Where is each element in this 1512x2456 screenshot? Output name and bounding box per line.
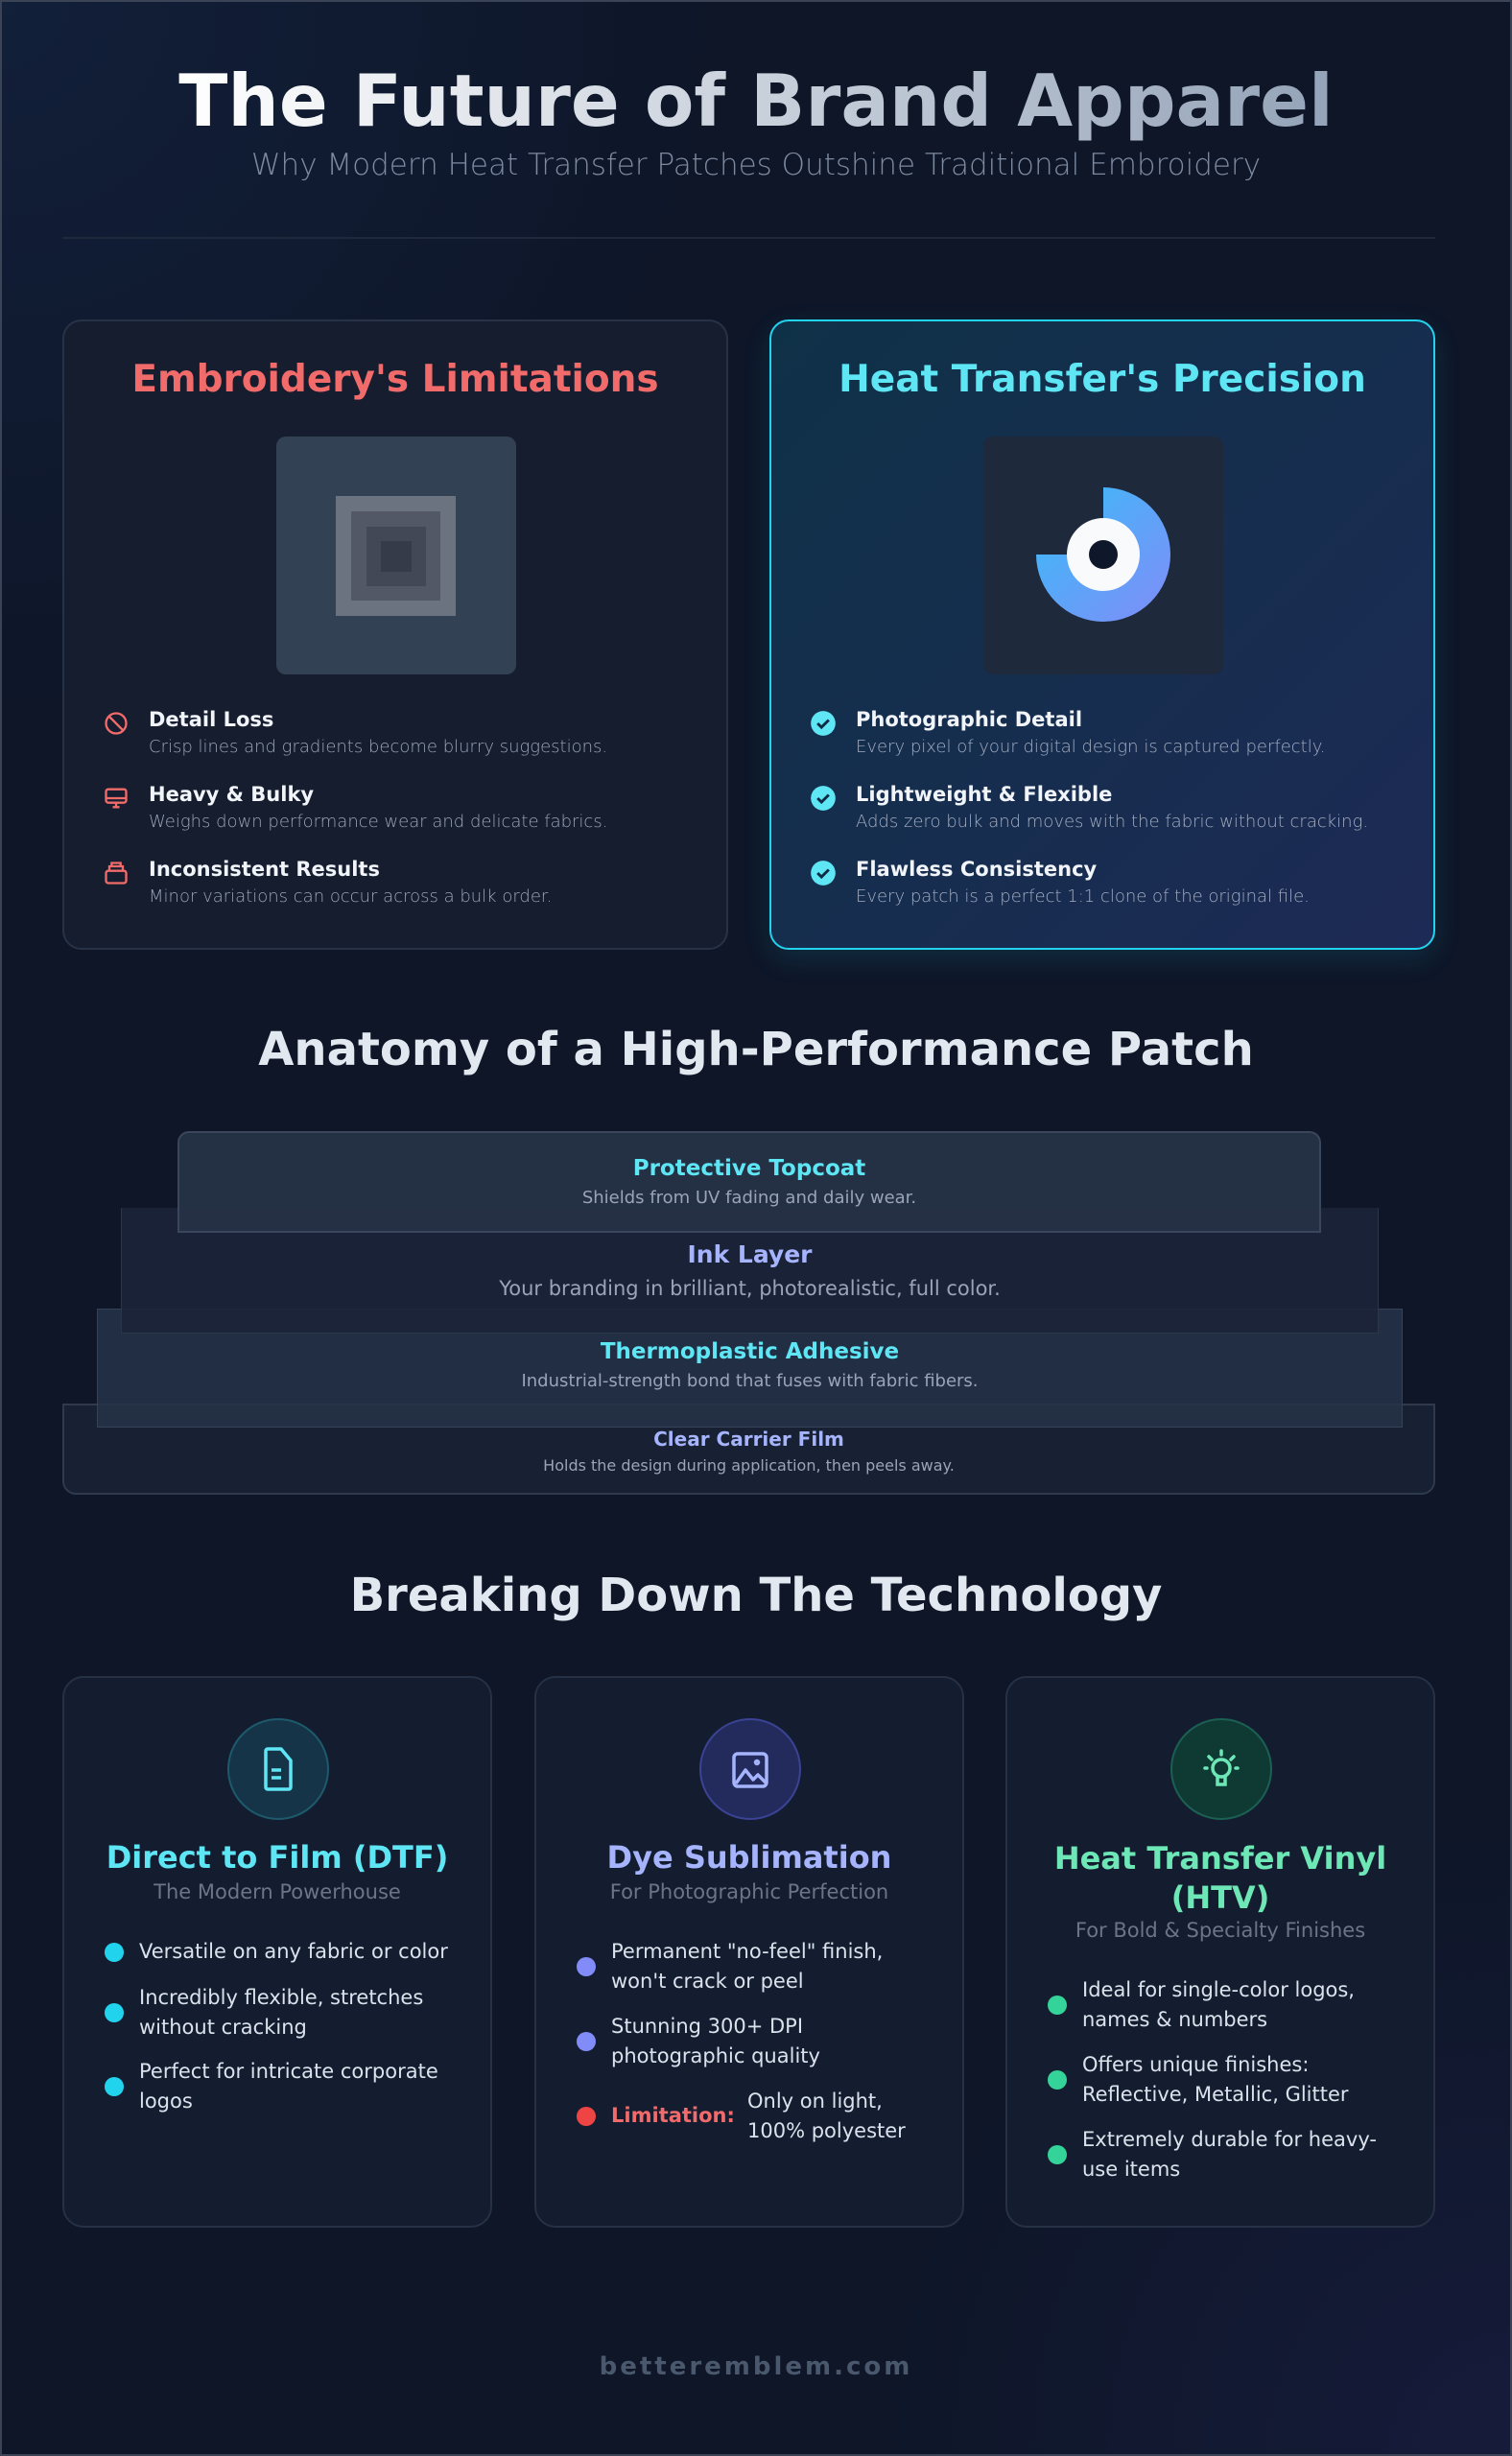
card: HTV: Extremely durable for heavy-use items [1082,2128,1377,2181]
card: HTV [1005,1676,1435,2228]
panel: embroidery limitations [62,319,728,950]
card: DTF [62,1676,492,2228]
layer: clear carrier film [62,1404,1435,1495]
footer: betteremblem.com [600,2352,912,2381]
title: The Future of Brand Apparel [178,59,1334,143]
icon: document [227,1718,329,1820]
panel: heat transfer precision: Flawless Consistency [856,858,1097,881]
title: dye sub: Dye Sublimation [607,1839,891,1876]
illustration: blurry squares [276,437,516,674]
item: photographic detail [811,708,1326,757]
layer: protective topcoat [177,1131,1321,1233]
heading: breaking down: Breaking Down The Technology [350,1569,1162,1622]
icon: bulb [1170,1718,1272,1820]
heading: heat transfer: Heat Transfer's Precision [839,358,1366,401]
item: consistency [811,858,1310,907]
layer: protective topcoat: Protective Topcoat [633,1156,865,1181]
subtitle: Why Modern Heat Transfer Patches Outshine Traditional Embroidery [251,148,1261,182]
layer: clear carrier film: Holds the design during application, then peels away. [543,1456,955,1475]
panel: embroidery limitations: Detail Loss [149,708,273,731]
heading: anatomy: Anatomy of a High-Performance Patch [258,1023,1254,1076]
title: HTV [1054,1840,1386,1916]
bullets: DTF: Versatile on any fabric or color [139,1940,448,1963]
icon: image [699,1718,801,1820]
panel: heat transfer precision [769,319,1435,950]
card: DTF: Incredibly flexible, stretches without cracking [139,1986,423,2039]
layer: clear carrier film: Clear Carrier Film [653,1428,844,1451]
item: heavy bulky [105,783,607,832]
panel: embroidery limitations: Weighs down performance wear and delicate fabrics. [149,812,607,832]
card: dye sublimation: Limitation: [611,2104,735,2127]
layer: thermoplastic adhesive: Thermoplastic Adhesive [601,1339,899,1364]
card: DTF: Perfect for intricate corporate logos [139,2060,438,2113]
heading: embroidery: Embroidery's Limitations [131,358,659,401]
bullets: HTV: Ideal for single-color logos, names & numbers [1082,1978,1355,2031]
panel: embroidery limitations: Crisp lines and gradients become blurry suggestions. [149,737,607,757]
panel: embroidery limitations: Minor variations can occur across a bulk order. [149,886,552,907]
card: HTV: For Bold & Specialty Finishes [1075,1919,1365,1942]
panel: heat transfer precision: Photographic Detail [856,708,1082,731]
layer: ink [121,1208,1379,1334]
layer: protective topcoat: Shields from UV fading and daily wear. [582,1188,916,1208]
layer: ink: Ink Layer [687,1240,813,1268]
item: inconsistent [105,858,552,907]
item: lightweight [811,783,1368,832]
layer: thermoplastic adhesive [97,1309,1403,1428]
title: HTV: (HTV) [1171,1879,1269,1916]
panel: embroidery limitations: Inconsistent Results [149,858,380,881]
card: dye sublimation: Stunning 300+ DPI photographic quality [611,2015,820,2067]
title: DTF: Direct to Film (DTF) [106,1839,448,1876]
card: dye sublimation [534,1676,964,2228]
illustration: sharp logo [983,437,1223,674]
card: HTV: Offers unique finishes: Reflective, Metallic, Glitter [1082,2053,1349,2106]
card: DTF: The Modern Powerhouse [154,1880,401,1903]
item: detail loss [105,708,607,757]
title: HTV: Heat Transfer Vinyl [1054,1840,1386,1877]
panel: heat transfer precision: Adds zero bulk and moves with the fabric without cracking. [856,812,1368,832]
layer: ink: Your branding in brilliant, photorealistic, full color. [499,1277,1001,1300]
layer: thermoplastic adhesive: Industrial-strength bond that fuses with fabric fibers. [521,1371,979,1391]
panel: embroidery limitations: Heavy & Bulky [149,783,314,806]
bullets: dye sub: Permanent "no-feel" finish, won't crack or peel [611,1940,883,1993]
layer stack diagram [62,1131,1435,1495]
card: dye sublimation: For Photographic Perfection [610,1880,888,1903]
card: dye sublimation: Only on light, 100% polyester [747,2090,906,2142]
panel: heat transfer precision: Lightweight & Flexible [856,783,1112,806]
panel: heat transfer precision: Every pixel of your digital design is captured perfectly. [856,737,1326,757]
panel: heat transfer precision: Every patch is a perfect 1:1 clone of the original file. [856,886,1310,907]
